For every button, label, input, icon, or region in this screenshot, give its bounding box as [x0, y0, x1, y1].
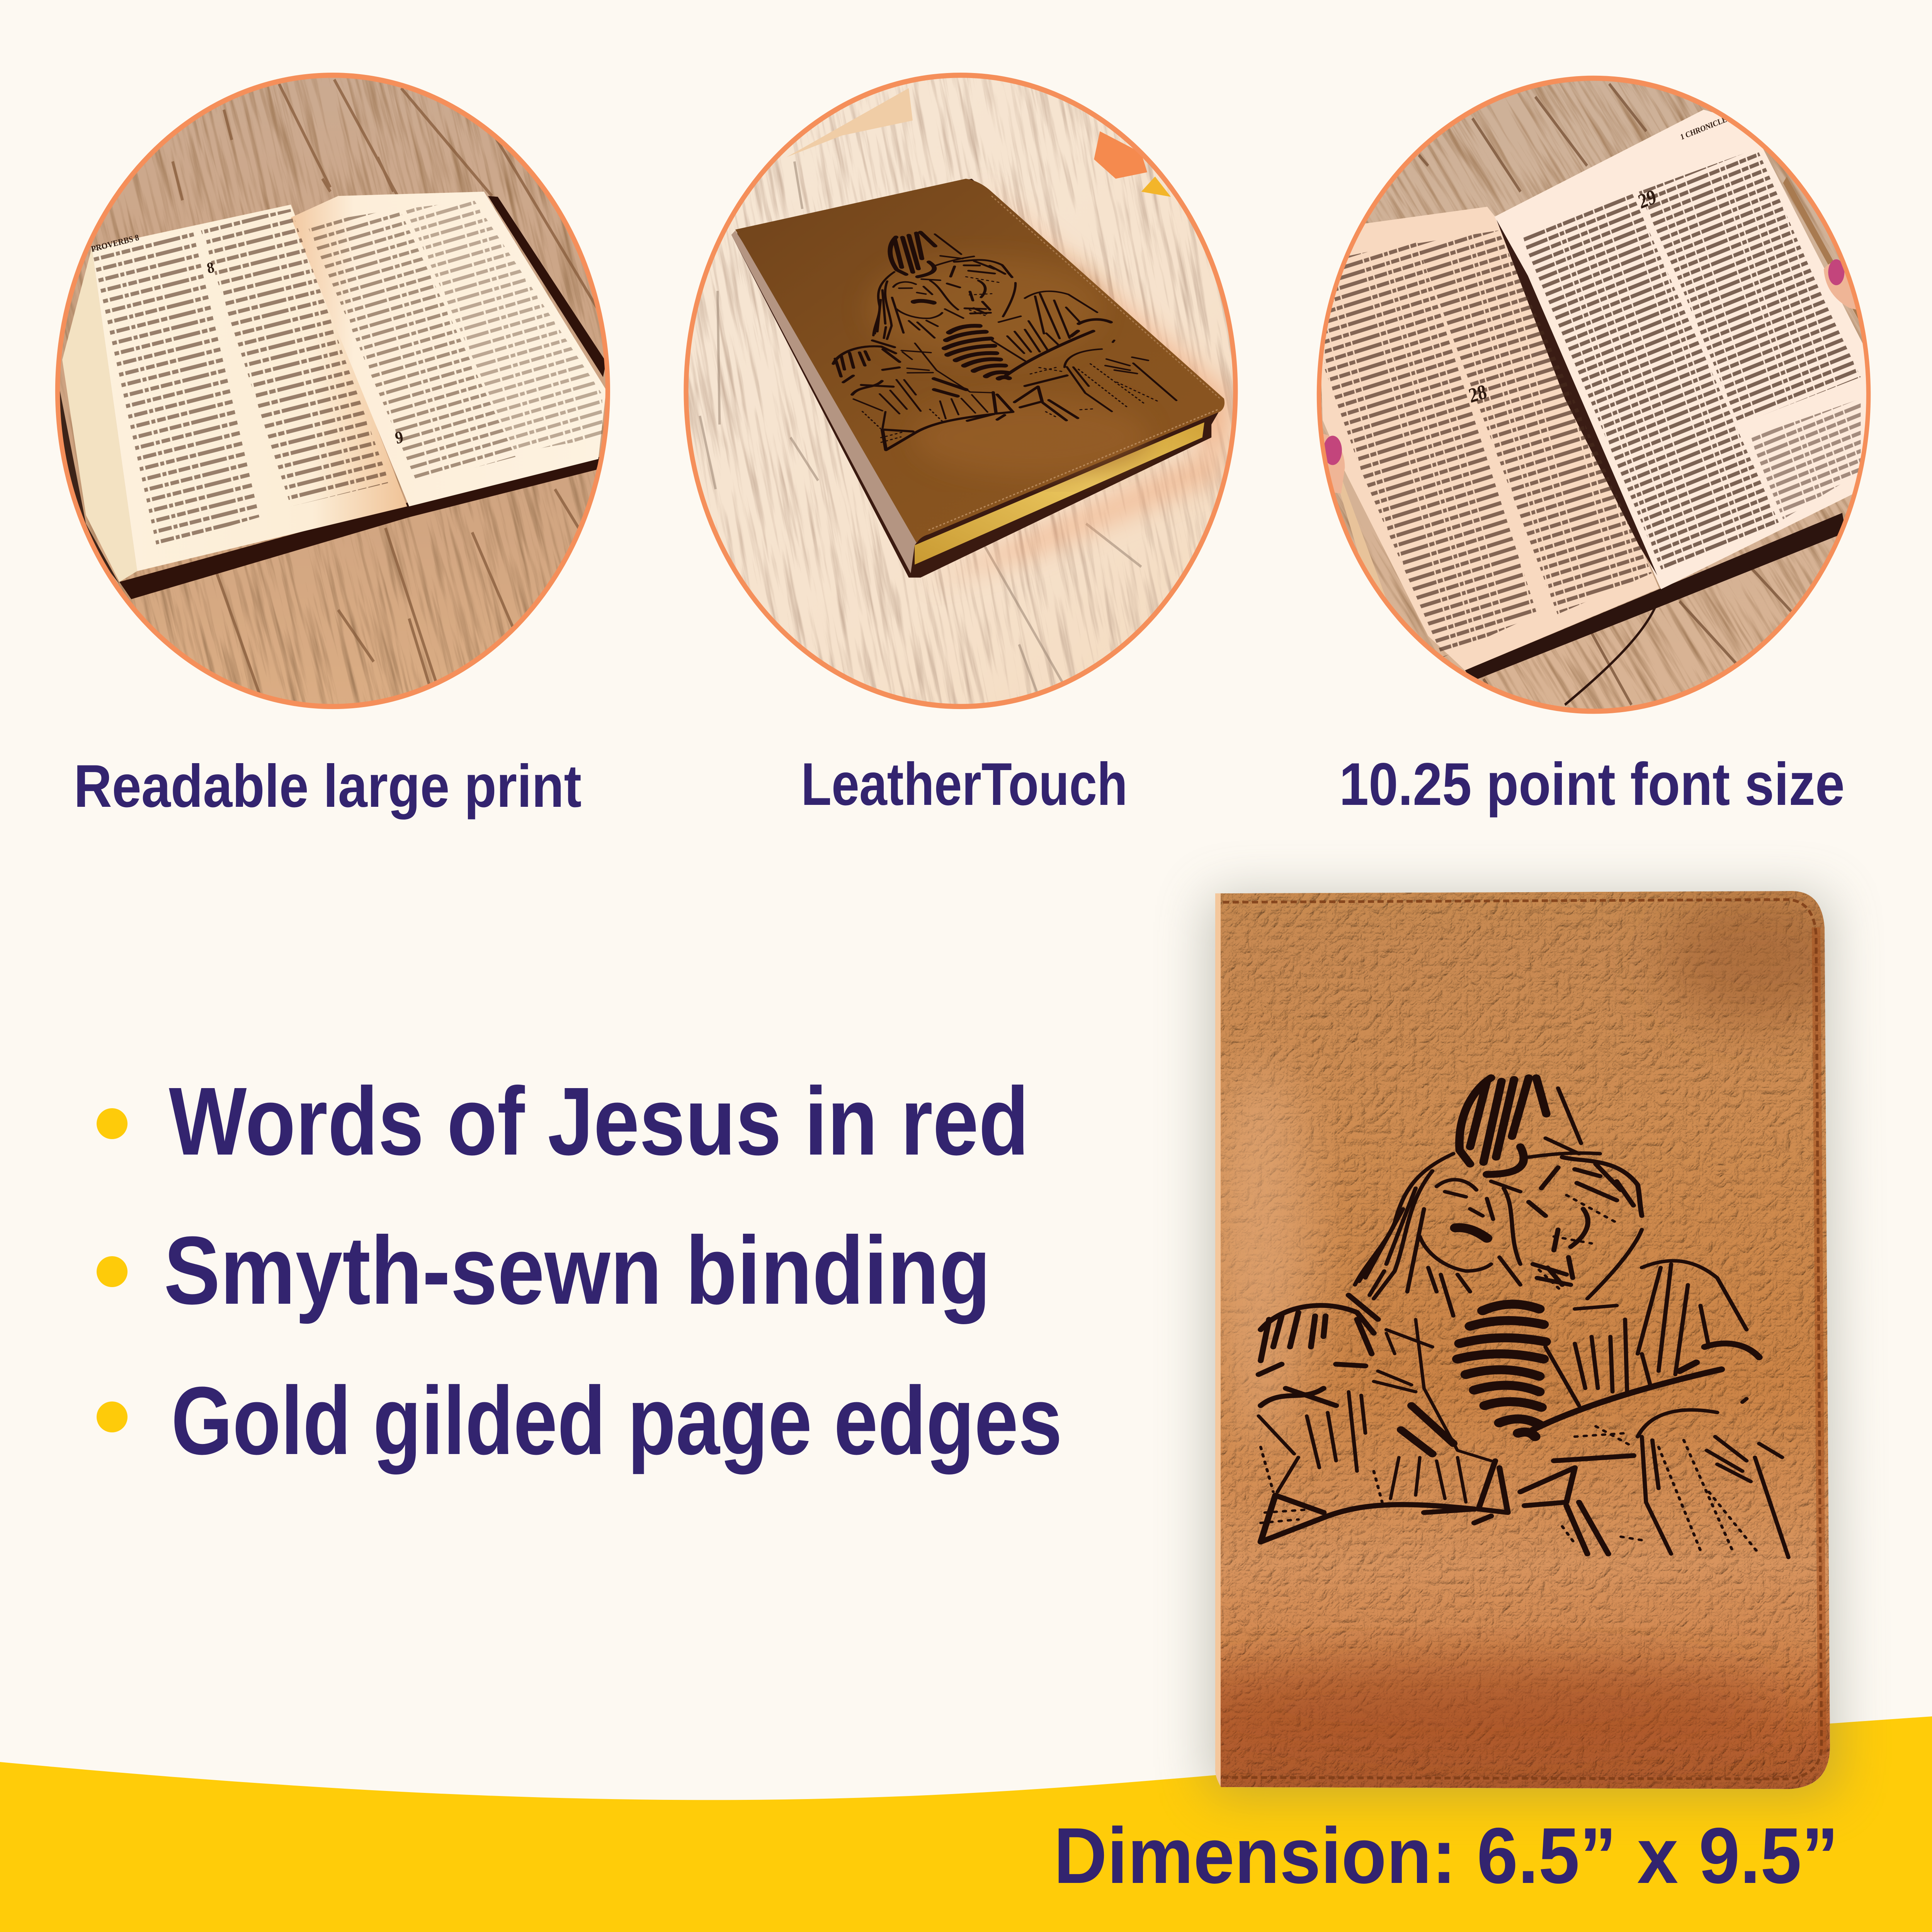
bullet 1 — [97, 1108, 128, 1139]
fingers — [1306, 262, 1869, 493]
book cover bottom — [1465, 513, 1846, 681]
spine — [731, 230, 925, 573]
engraved family portrait small — [770, 206, 1176, 457]
right page — [291, 192, 606, 507]
circle outline — [1319, 78, 1869, 711]
feature list — [97, 1067, 1062, 1475]
photo circle: open bible close-up: 1 CHRONICLES — [1679, 113, 1731, 142]
photo circle: open bible on wood: 9 — [393, 427, 405, 448]
photo circle: open bible close-up: 28 — [1466, 380, 1489, 407]
photo circle: open bible close-up: 29 — [1636, 185, 1659, 213]
circle outline — [686, 75, 1235, 706]
spine shadow — [1497, 219, 1657, 575]
yellow wave band — [0, 1716, 1932, 1932]
ribbon marker — [1565, 597, 1659, 705]
caption: leathertouch: LeatherTouch — [801, 751, 1128, 818]
photo circle: open bible on wood: 8 — [206, 259, 216, 277]
photo circle: open bible on wood: PROVERBS 8 — [90, 233, 140, 254]
book cover shadow — [119, 196, 606, 599]
right page — [1495, 110, 1869, 589]
large leather bible — [1159, 891, 1855, 1793]
feature: smyth sewn: Smyth-sewn binding — [164, 1216, 991, 1324]
photo circle: closed brown bible — [442, 0, 1471, 989]
photo circle: open bible on wood — [55, 73, 610, 709]
left page — [92, 204, 407, 571]
feature: gold gilded: Gold gilded page edges — [171, 1367, 1062, 1475]
bullet 3 — [97, 1401, 128, 1432]
book shadow — [920, 183, 1232, 584]
leather cover — [1215, 891, 1830, 1789]
circle outline — [58, 75, 608, 706]
feature: words of jesus: Words of Jesus in red — [169, 1067, 1029, 1175]
caption: font size: 10.25 point font size — [1339, 751, 1845, 818]
left page — [1317, 207, 1659, 670]
bullet 2 — [97, 1256, 128, 1287]
photo circle: open bible close-up — [1026, 0, 1932, 1068]
book shadow — [1209, 896, 1835, 1793]
cover — [735, 179, 1225, 543]
engraved family portrait — [1259, 1078, 1788, 1558]
caption: readable large print: Readable large print — [74, 753, 582, 820]
dimension label: Dimension: 6.5” x 9.5” — [1054, 1811, 1838, 1900]
page block left — [62, 248, 137, 582]
page edge — [915, 422, 1204, 565]
page edge left — [1321, 429, 1386, 597]
